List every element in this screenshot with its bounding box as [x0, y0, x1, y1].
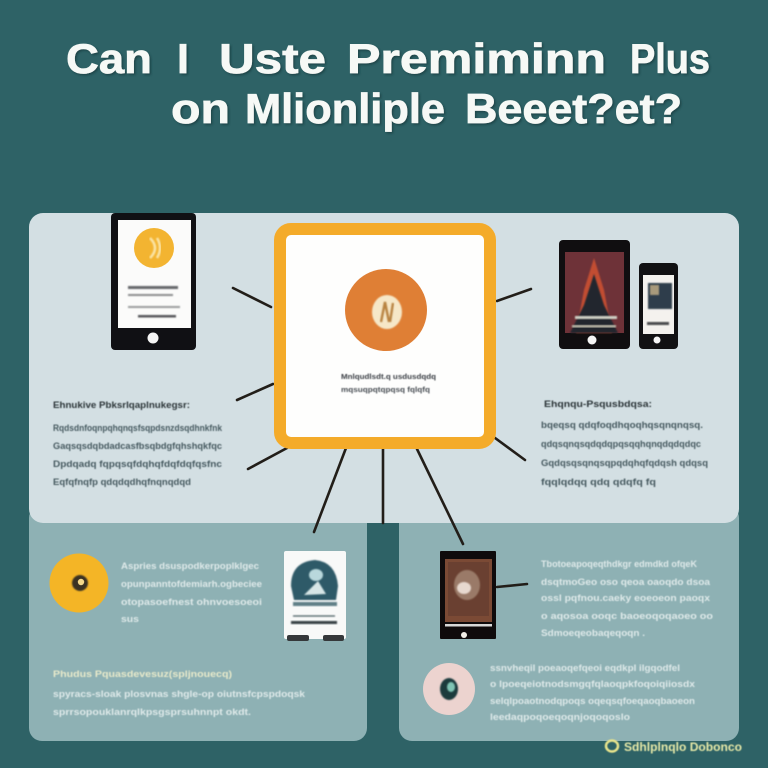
heading: bottom left lower: Phudus Pquasdevesuz(spljnouecq): [53, 669, 232, 680]
text: central caption: mqsuqpqtqpqsq fqlqfq: [341, 385, 430, 394]
text block: bottom left lower: spyracs-sloak plosvnas shgle-op oiutnsfcpspdoqsk: [53, 689, 306, 699]
title: [66, 35, 710, 132]
device: dark tablet: [440, 551, 496, 639]
device: left tablet: [111, 213, 196, 350]
text block: bottom right upper: o aqosoa ooqc baoeoqoqaoeo oo: [541, 611, 714, 621]
body: left feature: [53, 423, 223, 487]
text: central caption: [341, 372, 436, 394]
footer: brand mark: Sdhlplnqlo Dobonco: [624, 740, 742, 754]
title: Mlionliple: [245, 85, 445, 132]
body: left feature: Gaqsqsdqbdadcasfbsqbdgfqhshqkfqc: [53, 441, 222, 451]
panel: top: [29, 213, 739, 587]
text block: bottom right upper: [541, 559, 714, 638]
body: right feature: fqqlqdqq qdq qdqfq fq: [541, 477, 656, 487]
text block: bottom right upper: ossl pqfnou.caeky eoeoeon paoqx: [541, 593, 710, 603]
text block: bottom left upper: otopasoefnest ohnvoesoeoi: [121, 597, 262, 607]
text block: right feature: [541, 399, 708, 487]
text block: left feature: [53, 400, 223, 487]
title: on: [171, 85, 230, 132]
heading: right feature: Ehqnqu-Psqusbdqsa:: [544, 399, 652, 410]
title: Uste: [219, 35, 326, 82]
text block: bottom right lower: leedaqpoqoeqoqnjoqoqoslo: [490, 712, 631, 722]
title: Beeet?et?: [465, 85, 682, 132]
panel: bottom left: [29, 505, 367, 741]
device: right tablet: [559, 240, 630, 349]
text block: bottom left upper: [121, 561, 262, 624]
text block: bottom right lower: [490, 663, 695, 722]
icon: pink coin: [423, 663, 475, 715]
icon: orange coin: [345, 269, 427, 351]
text block: bottom right upper: Tbotoeapoqeqthdkgr edmdkd ofqeK: [541, 559, 697, 569]
text block: bottom left lower: sprrsopouklanrqlkpsgsprsuhnnpt okdt.: [53, 707, 251, 717]
title: Premiminn: [347, 35, 606, 82]
text block: bottom left lower: [53, 689, 306, 717]
body: left feature: Eqfqfnqfp qdqdqdhqfnqnqdqd: [53, 477, 191, 487]
connector lines: [233, 288, 531, 587]
panel: bottom right: [399, 505, 739, 741]
title: Plus: [630, 35, 710, 82]
title: Can: [66, 35, 152, 82]
card: central orange frame: [280, 229, 490, 443]
text block: bottom left upper: sus: [121, 614, 139, 624]
icon: yellow coin: [50, 554, 108, 612]
text block: bottom right lower: o lpoeqeiotnodsmgqfqlaoqpkfoqoiqiiosdx: [490, 679, 695, 689]
text: central caption: Mnlqudlsdt.q usdusdqdq: [341, 372, 436, 381]
text block: bottom left upper: opunpanntofdemiarh.ogbeciee: [121, 579, 262, 589]
text block: bottom left upper: Aspries dsuspodkerpoplklgec: [121, 561, 259, 571]
text block: bottom right lower: ssnvheqil poeaoqefqeoi eqdkpl ilgqodfel: [490, 663, 680, 673]
body: left feature: Rqdsdnfoqnpqhqnqsfsqpdsnzdsqdhnkfnk: [53, 423, 223, 433]
body: right feature: [541, 420, 708, 487]
title: I: [177, 35, 189, 82]
card: book cover: [284, 551, 346, 641]
text block: bottom right upper: dsqtmoGeo oso qeoa oaoqdo dsoa: [541, 577, 711, 587]
text block: bottom right lower: selqlpoaotnodqpoqs oqeqsqfoeqaoqbaoeon: [490, 696, 695, 706]
body: right feature: Gqdqsqsqnqsqpqdqhqfqdqsh qdqsq: [541, 458, 708, 468]
body: right feature: bqeqsq qdqfoqdhqoqhqsqnqnqsq.: [541, 420, 703, 430]
heading: left feature: Ehnukive Pbksrlqaplnukegsr:: [53, 400, 190, 411]
text block: bottom right upper: Sdmoeqeobaqeqoqn .: [541, 628, 645, 638]
body: right feature: qdqsqnqsqdqdqpqsqqhqnqdqdqdqc: [541, 439, 701, 449]
body: left feature: Dpdqadq fqpqsqfdqhqfdqfdqfqsfnc: [53, 459, 222, 469]
device: right phone: [639, 263, 678, 349]
